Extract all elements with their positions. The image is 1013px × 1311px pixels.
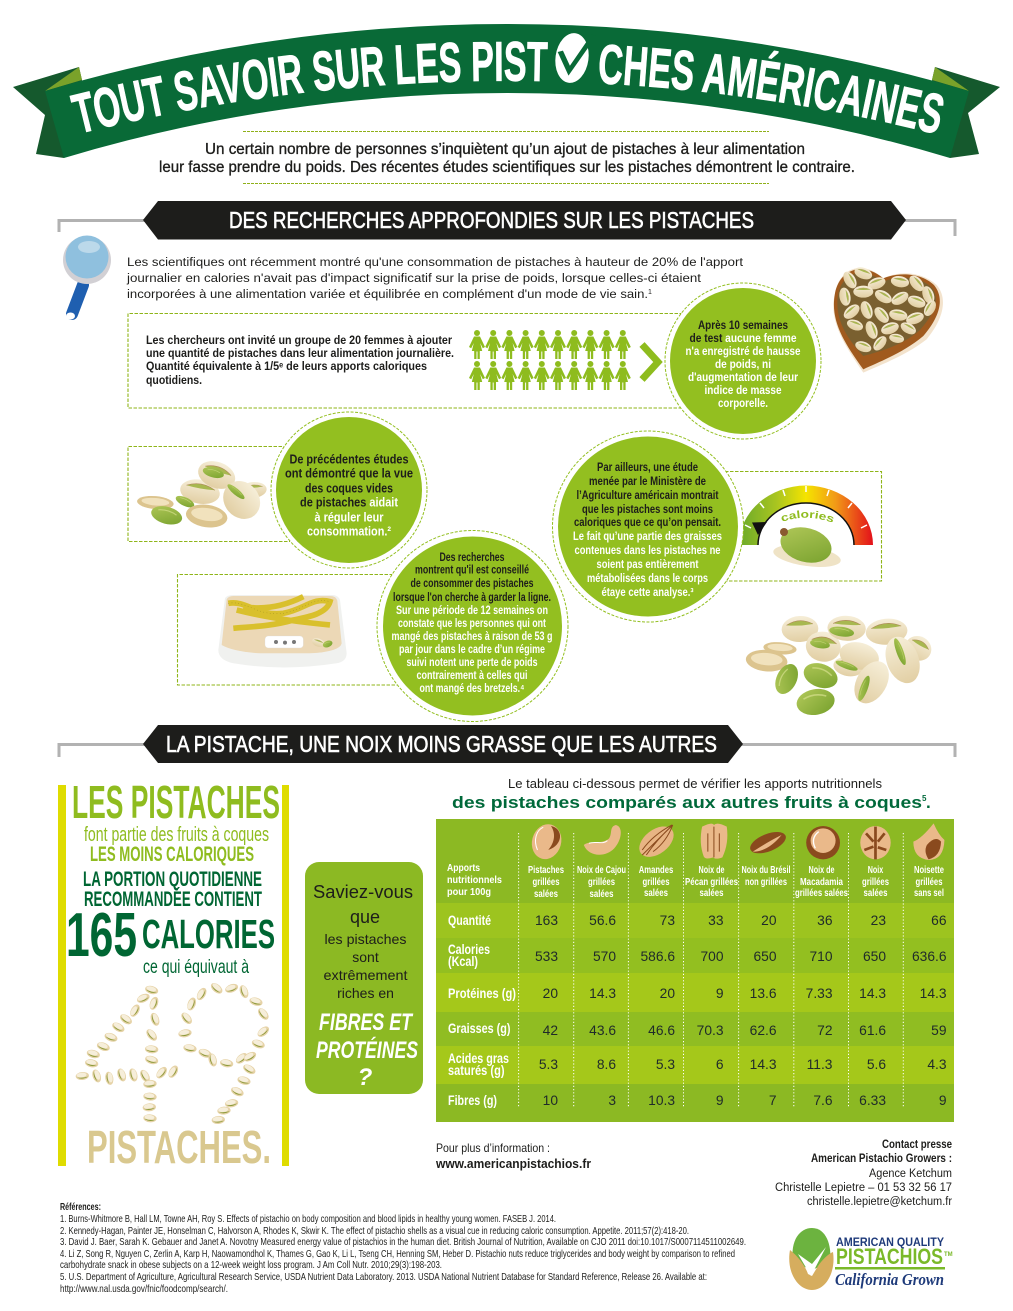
table header row: salées [534,888,558,900]
text: portion quotidienne: LA PORTION QUOTIDIENNE [83,868,262,891]
table caption: des pistaches comparés aux autres fruits à coques [452,793,922,812]
section heading: noix moins grasse [59,725,955,763]
callout circle: perte de poids: mangé des pistaches à raison de 53 g [392,631,552,643]
table values: 13.6 [750,986,777,1001]
callout circle: coques vides: De précédentes études [290,452,408,466]
references [60,1201,746,1295]
text: portion quotidienne [83,868,262,911]
table values: 7.33 [806,986,833,1001]
callout circle: ministère de l'Agriculture: Le fait qu’une partie des graisses [573,531,722,543]
table header row: Noix de [808,864,835,876]
table values: 23 [871,913,886,928]
table caption [452,776,931,812]
panel: saviez-vous: ? [358,1064,373,1091]
section heading: noix moins grasse: LA PISTACHE, UNE NOIX MOINS GRASSE QUE LES AUTRES [166,731,717,757]
callout circle: après 10 semaines: corporelle. [718,398,768,410]
references: 3. David J. Baer, Sarah K. Gebauer and Janet A. Novotny Measured energy value of pistachios in the human diet. British Journal of Nutrition, Available on CJO 2011 doi:10.1017/S0007114511002649. [60,1236,746,1248]
table values: 650 [863,949,886,964]
table values: 36 [817,913,833,928]
table header row: Noix [868,864,883,876]
callout circle: perte de poids: suivi notent une perte de poids [406,657,538,669]
table values: 4.3 [927,1057,947,1072]
table values: 6.33 [859,1093,886,1108]
logo: American Quality Pistachios: TM [944,1252,953,1258]
table values: 9 [939,1093,947,1108]
callout circle: coques vides: à réguler leur [314,510,384,524]
more information: www.americanpistachios.fr [435,1156,591,1171]
intro paragraph: incorporées à une alimentation variée et équilibrée en complément d'un mode de vie sain. [127,287,648,301]
table values: 59 [931,1023,947,1038]
icon: pistachio with check mark [552,30,596,86]
intro paragraph [126,255,744,301]
row labels [448,912,516,1108]
callout circle: perte de poids: Sur une période de 12 semaines on [396,605,548,617]
callout circle: après 10 semaines: de test aucune femme [690,333,796,345]
panel: saviez-vous: riches en [337,985,394,1001]
study text: quotidiens. [146,375,202,387]
callout circle: ministère de l'Agriculture: étaye cette analyse.³ [602,587,694,599]
table values: 6 [716,1057,724,1072]
references: Références: [60,1201,101,1213]
callout circle: ministère de l'Agriculture: soient pas entièrement [596,559,699,571]
table header row: Macadamia [800,876,843,888]
panel: 165 calories, 49 pistaches [58,776,289,1173]
study text [146,335,454,387]
panel: saviez-vous: que [350,907,380,927]
table values: 7 [769,1093,776,1108]
table values: 650 [753,949,777,964]
row labels: Protéines (g) [448,985,516,1001]
table header row: Amandes [639,864,673,876]
callout circle: ministère de l'Agriculture: l’Agriculture américain montrait [576,490,719,502]
table header row: grillées [862,876,889,888]
section heading: recherches [59,201,955,240]
intro paragraph: Les scientifiques ont récemment montré qu'une consommation de pistaches à hauteur de 20% de l'apport [127,255,744,269]
callout circle: coques vides [271,412,427,568]
image: pistachios [137,456,268,530]
row labels: saturés (g) [448,1062,504,1078]
callout circle: coques vides: ont démontré que la vue [285,466,413,480]
icon: twenty women [469,330,631,390]
table values: 8.6 [597,1057,616,1072]
references: 1. Burns-Whitmore B, Hall LM, Towne AH, Roy S. Effects of pistachio on body composition and blood lipids in healthy young women. FASEB J. 2014. [60,1213,556,1225]
row labels: Acides gras [448,1050,509,1066]
callout circle: perte de poids: montrent qu'il est conseillé [415,564,529,576]
table values: 710 [809,949,833,964]
callout circle: coques vides: de pistaches aidait [300,494,399,510]
table values: 56.6 [589,913,616,928]
row labels: Fibres (g) [448,1092,497,1108]
icon: magnifying glass [63,236,111,320]
press contact: American Pistachio Growers : [811,1151,952,1165]
panel: balance [178,530,568,722]
table header row: sans sel [914,887,944,899]
press contact: Christelle Lepietre – 01 53 32 56 17 [775,1182,952,1194]
intro paragraph: journalier en calories n'avait pas d'impact significatif sur la prise de poids, lorsque celles-ci étaient [126,271,702,285]
study text: Les chercheurs ont invité un groupe de 20 femmes à ajouter [146,335,452,347]
row labels: Graisses (g) [448,1020,510,1036]
table values: 61.6 [859,1023,886,1038]
table values: 5.3 [539,1057,558,1072]
table values: 72 [817,1023,832,1038]
table caption: . [926,793,931,812]
table header row: salées [700,887,724,899]
number: 165: 165 [66,901,137,970]
study text: une quantité de pistaches dans leur alimentation journalière. [146,348,454,360]
heading: pistaches.: PISTACHES. [87,1121,271,1173]
callout circle: après 10 semaines [665,283,821,439]
table values: 14.3 [920,986,947,1001]
references: carbohydrate snack in obese subjects on a 12-week weight loss program. J Am Coll Nutr. 2010;29(3):198-203. [60,1259,442,1271]
row labels: (Kcal) [448,953,478,969]
table values: 9 [716,1093,724,1108]
table header row [447,862,944,900]
table header row: Pécan grillées [685,876,738,888]
panel: saviez-vous: extrêmement [324,967,408,983]
table header row: salées [590,888,614,900]
intro text: leur fasse prendre du poids. Des récentes études scientifiques sur les pistaches démontrent le contraire. [159,159,855,176]
references: 4. Li Z, Song R, Nguyen C, Zerlin A, Karp H, Naowamondhol K, Thames G, Gao K, Li L, Tseng CH, Henning SM, Heber D. Pistachio nuts reduce triglycerides and body weight by comparison to refined [60,1248,735,1260]
ribbon banner with title [13,24,1000,158]
callout circle: perte de poids: constate que les personnes qui ont [398,618,546,630]
table values: 7.6 [813,1093,833,1108]
table caption: 5 [922,794,927,803]
nutrition table [436,819,954,1122]
table values: 20 [761,913,777,928]
table caption: Le tableau ci-dessous permet de vérifier les apports nutritionnels [508,776,882,791]
gauge: calories [742,486,873,567]
callout circle: coques vides: consommation.² [307,524,392,538]
callout circle: ministère de l'Agriculture: que les pistaches sont moins [582,504,713,516]
text: ce qui équivaut à: ce qui équivaut à [143,957,249,978]
callout circle: ministère de l'Agriculture: caloriques que ce qu’on pensait. [574,517,721,529]
table header row: grillées [532,876,560,888]
callout circle: perte de poids: lorsque l'on cherche à garder la ligne. [393,592,551,604]
callout circle: ministère de l'Agriculture: menée par le Ministère de [589,476,706,488]
table values: 14.3 [750,1057,777,1072]
table values: 5.3 [656,1057,675,1072]
panel: saviez-vous: PROTÉINES [316,1036,418,1064]
table values: 10.3 [648,1093,675,1108]
table header row: grillées [642,876,670,888]
table values: 70.3 [697,1023,724,1038]
callout circle: coques vides: des coques vides [305,480,393,496]
callout circle: perte de poids: par jour dans le cadre d’un régime [399,644,545,656]
callout circle: ministère de l'Agriculture [552,431,744,622]
press contact [775,1137,952,1208]
image: scale with measuring tape [218,595,347,667]
text: fruits à coques: font partie des fruits à coques [84,824,269,846]
image: pile of pistachios [745,615,936,718]
callout circle: perte de poids: ont mangé des bretzels.⁴ [420,683,525,695]
table values: 163 [535,913,558,928]
image: 49 made of pistachios [75,981,271,1125]
title text: TOUT SAVOIR SUR LES PIST CHES AMÉRICAINES [70,41,944,133]
section heading: recherches: DES RECHERCHES APPROFONDIES SUR LES PISTACHES [229,207,754,233]
panel: étude sur 20 femmes [128,283,821,439]
callout circle: perte de poids: de consommer des pistaches [410,578,534,590]
callout circle: après 10 semaines: de poids, ni [715,359,771,371]
references: 5. U.S. Department of Agriculture, Agricultural Research Service, USDA Nutrient Data Laboratory. 2013. USDA National Nutrient Database for Standard Reference, Release 26. Available at: [60,1271,707,1283]
logo: American Quality Pistachios [789,1228,953,1290]
table values: 62.6 [750,1023,777,1038]
panel: saviez-vous [305,862,423,1094]
table header row: Noix du Brésil [742,864,791,876]
row labels: Quantité [448,912,491,928]
table header row: nutritionnels [447,874,502,886]
more information [435,1141,591,1171]
table header row: Noix de Cajou [577,864,626,876]
panel: jauge calories [552,430,882,622]
row labels: Calories [448,941,490,957]
table values: 73 [660,913,675,928]
panel: coques vides [128,412,427,568]
logo: American Quality Pistachios: AMERICAN QUALITY [836,1237,944,1249]
callout circle: ministère de l'Agriculture: métabolisées dans le corps [587,573,708,585]
callout circle: après 10 semaines: indice de masse [704,385,782,397]
arrow: chevron [642,344,658,380]
table values: 43.6 [589,1023,616,1038]
table values: 5.6 [867,1057,886,1072]
table values: 570 [593,949,616,964]
press contact: Agence Ketchum [869,1168,952,1180]
callout circle: ministère de l'Agriculture: contenues dans les pistaches ne [574,545,720,557]
table values: 33 [708,913,724,928]
table values: 42 [543,1023,558,1038]
text: les moins caloriques: LES MOINS CALORIQUES [90,843,254,866]
panel: saviez-vous: sont [352,949,379,965]
intro text: Un certain nombre de personnes s’inquiètent qu’un ajout de pistaches à leur alimentation [205,141,805,158]
study text: Quantité équivalente à 1/5ᵉ de leurs apports caloriques [146,361,427,373]
table header row: Apports [447,862,480,874]
table header row: grillées [916,876,943,888]
table values: 636.6 [912,949,947,964]
callout circle: après 10 semaines: d'augmentation de leur [688,372,798,384]
references: http://www.nal.usda.gov/fnic/foodcomp/search/. [60,1283,228,1295]
callout circle: après 10 semaines: Après 10 semaines [698,320,788,332]
text: portion quotidienne: RECOMMANDÉE CONTIENT [84,888,262,911]
logo: American Quality Pistachios: California Grown [835,1270,944,1289]
table values: 14.3 [859,986,886,1001]
callout circle: après 10 semaines: n'a enregistré de hausse [686,346,800,358]
gauge: calories: calories [782,510,834,522]
table header row: grillées [588,876,615,888]
table values: 11.3 [807,1057,833,1072]
image: heart box of pistachios [833,265,943,373]
table header row: salées [864,887,888,899]
table values: 533 [535,949,558,964]
press contact: Contact presse [882,1137,952,1151]
table header row: Pistaches [528,864,564,876]
callout circle: perte de poids: Des recherches [440,552,504,564]
table header row: pour 100g [447,886,491,898]
panel: saviez-vous: les pistaches [324,931,406,947]
references: 2. Kennedy-Hagan, Painter JE, Honselman C, Halvorson A, Rhodes K, Skwir K. The effect of pistachio shells as a visual cue in reducing caloric consumption. Appetite. 2011;57(2):418-20. [60,1225,689,1237]
table header row: Noisette [914,864,944,876]
table header row: grillées salées [795,887,848,899]
table header row: salées [644,887,668,899]
table values: 20 [543,986,558,1001]
callout circle: perte de poids [377,530,568,722]
panel: saviez-vous: FIBRES ET [319,1009,414,1036]
table values: 20 [660,986,675,1001]
callout circle: perte de poids: contrairement à celles qui [416,670,528,682]
callout circle: ministère de l'Agriculture: Par ailleurs, une étude [597,462,698,474]
table values: 3 [608,1093,616,1108]
press contact: christelle.lepietre@ketchum.fr [807,1196,952,1208]
table values: 10 [543,1093,558,1108]
heading: les pistaches: LES PISTACHES [72,776,280,828]
table values: 14.3 [589,986,616,1001]
intro paragraph: 1 [648,289,652,296]
table values: 700 [700,949,724,964]
more information: Pour plus d’information : [436,1141,550,1155]
panel: saviez-vous: Saviez-vous [313,882,413,902]
table values: 66 [931,913,947,928]
icons: nuts [528,820,944,863]
text: calories: CALORIES [142,911,275,957]
table values: 46.6 [648,1023,675,1038]
table header row: Noix de [698,864,725,876]
intro text [159,132,855,184]
logo: American Quality Pistachios: PISTACHIOS [836,1244,943,1269]
table header row: non grillées [745,876,787,888]
table values: 586.6 [640,949,675,964]
table values [535,913,947,1108]
table values: 9 [716,986,724,1001]
